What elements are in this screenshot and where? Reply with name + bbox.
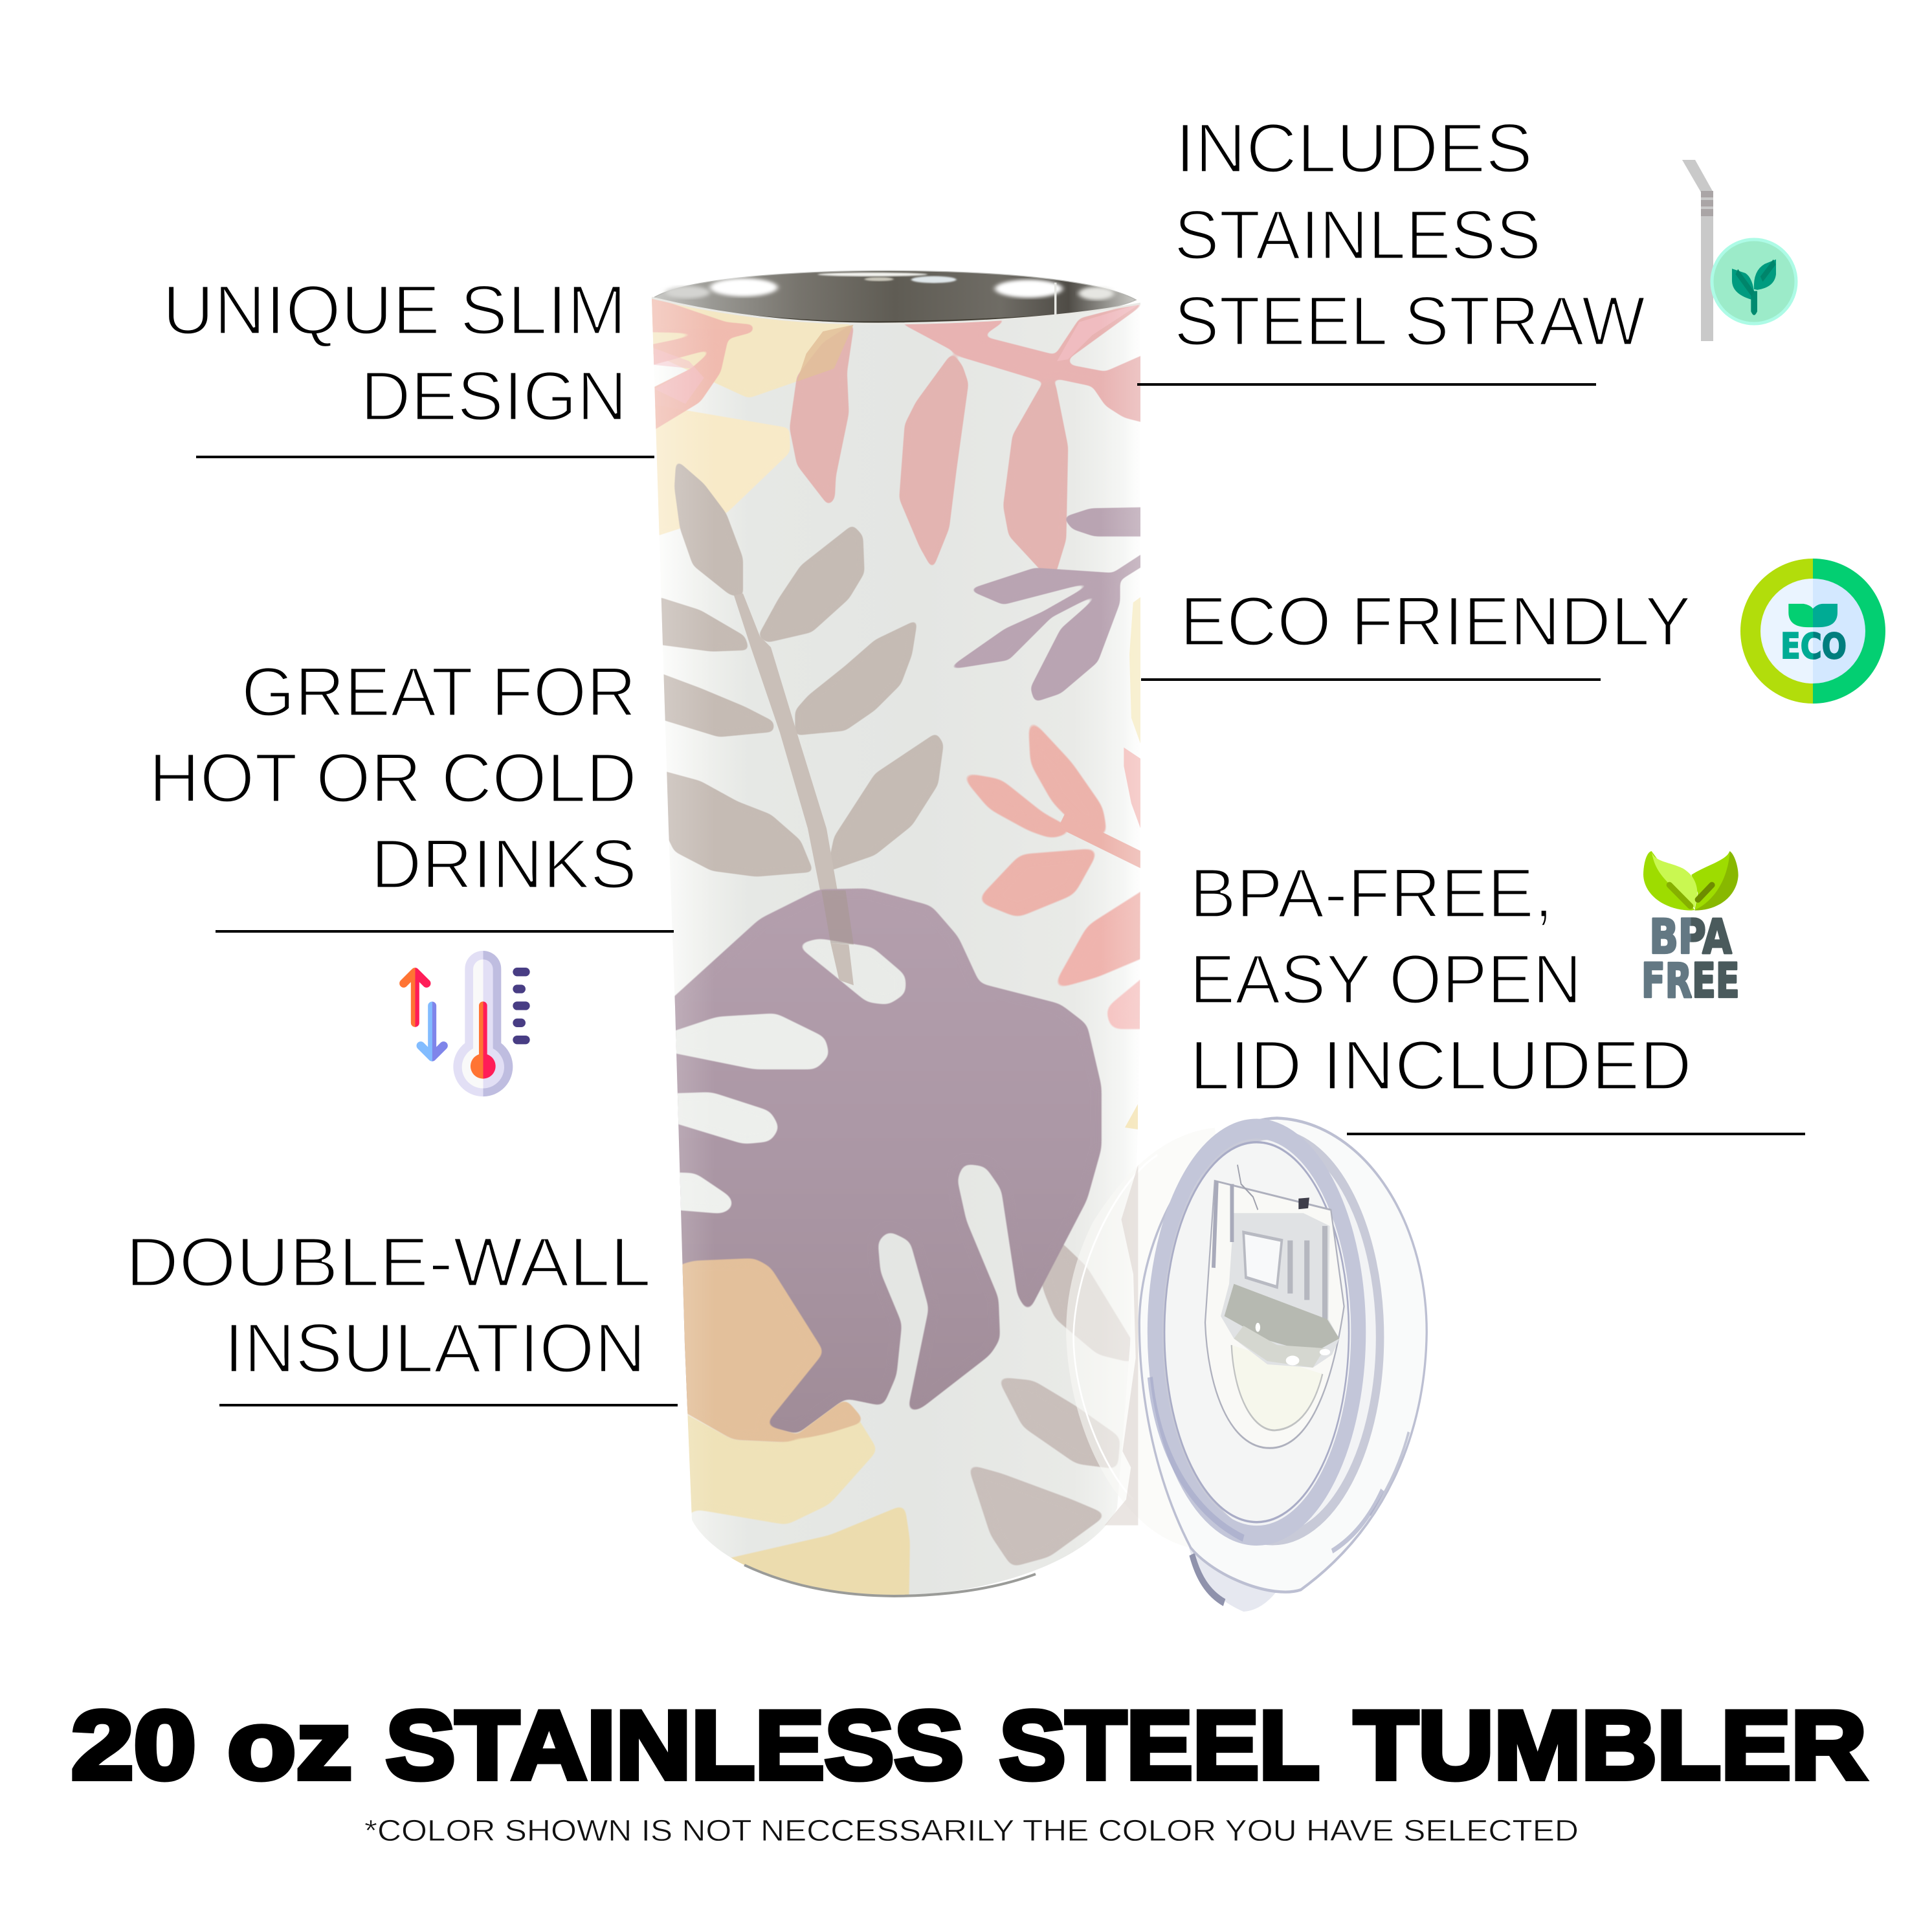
- callout: stainless steel straw: INCLUDES: [1175, 109, 1533, 187]
- callout: double-wall insulation: DOUBLE-WALL: [126, 1223, 651, 1301]
- icon: bpa free leaves: FREE: [1641, 954, 1740, 1008]
- callout: stainless steel straw: STAINLESS: [1174, 195, 1541, 274]
- icon: thermometer with hot and cold arrows: [404, 951, 530, 1096]
- lid pour lip: [1188, 1532, 1284, 1612]
- title: TUMBLER: [1354, 1691, 1867, 1799]
- lid back shell: [1066, 1127, 1253, 1548]
- tumbler rim and steel interior: [654, 271, 1136, 324]
- beige fern: [656, 460, 944, 877]
- lower pink fern: [966, 724, 1140, 1030]
- callout: bpa-free lid: LID INCLUDED: [1190, 1026, 1692, 1104]
- tumbler: [645, 271, 1159, 1607]
- callout: hot or cold drinks: HOT OR COLD: [149, 738, 637, 817]
- monstera leaf: [663, 888, 1102, 1434]
- lid outer rim: [1139, 1118, 1427, 1592]
- callout: eco friendly: ECO FRIENDLY: [1180, 582, 1691, 660]
- beige fern stem: [734, 594, 838, 891]
- callout: unique slim design: [162, 271, 654, 458]
- outer ring band: [1164, 1134, 1380, 1540]
- callout: hot or cold drinks: DRINKS: [371, 825, 637, 903]
- callout: hot or cold drinks: GREAT FOR: [241, 652, 636, 731]
- tumbler edge seen through shell: [1105, 1165, 1138, 1526]
- callout: stainless steel straw: [1137, 109, 1645, 386]
- title: STEEL: [999, 1691, 1320, 1799]
- icon: bpa free leaves: [1641, 851, 1740, 1008]
- callout: bpa-free lid: [1190, 854, 1805, 1135]
- tumbler body with printed pattern: [645, 285, 1159, 1607]
- transparent lid: [1066, 1118, 1427, 1612]
- callout: hot or cold drinks: [149, 652, 674, 933]
- callout: stainless steel straw: STEEL STRAW: [1174, 282, 1645, 360]
- callout: double-wall insulation: [126, 1223, 678, 1406]
- rim highlight: [652, 298, 1140, 324]
- slide tab: [1214, 1165, 1339, 1368]
- purple fern: [946, 507, 1150, 702]
- icon: bpa free leaves: BPA: [1649, 911, 1732, 965]
- icon: steel straw with sprout: [1682, 160, 1796, 341]
- callout: bpa-free lid: EASY OPEN: [1190, 940, 1582, 1018]
- icon: eco badge: ECO: [1781, 626, 1847, 667]
- upper pattern: [645, 294, 1150, 877]
- callout: bpa-free lid: BPA-FREE,: [1190, 854, 1553, 932]
- disclaimer note: *COLOR SHOWN IS NOT NECCESSARILY THE COLOR YOU HAVE SELECTED: [364, 1814, 1579, 1847]
- title: STAINLESS: [386, 1691, 964, 1799]
- title: [71, 1691, 1867, 1799]
- base shadow: [744, 1565, 1036, 1596]
- title: 20 oz: [71, 1691, 352, 1799]
- monstera cut-outs: [676, 938, 906, 1214]
- beige leaves: [968, 1235, 1134, 1567]
- icon: eco badge: [1740, 559, 1885, 704]
- callout: unique slim design: DESIGN: [361, 357, 627, 435]
- lower pattern: [647, 888, 1134, 1607]
- edge fade shading: [652, 299, 697, 1417]
- callout: double-wall insulation: INSULATION: [224, 1309, 646, 1387]
- lid inner recess: [1205, 1181, 1344, 1448]
- callout: unique slim design: UNIQUE SLIM: [162, 271, 627, 349]
- orange hexagon overlap: [674, 1258, 865, 1442]
